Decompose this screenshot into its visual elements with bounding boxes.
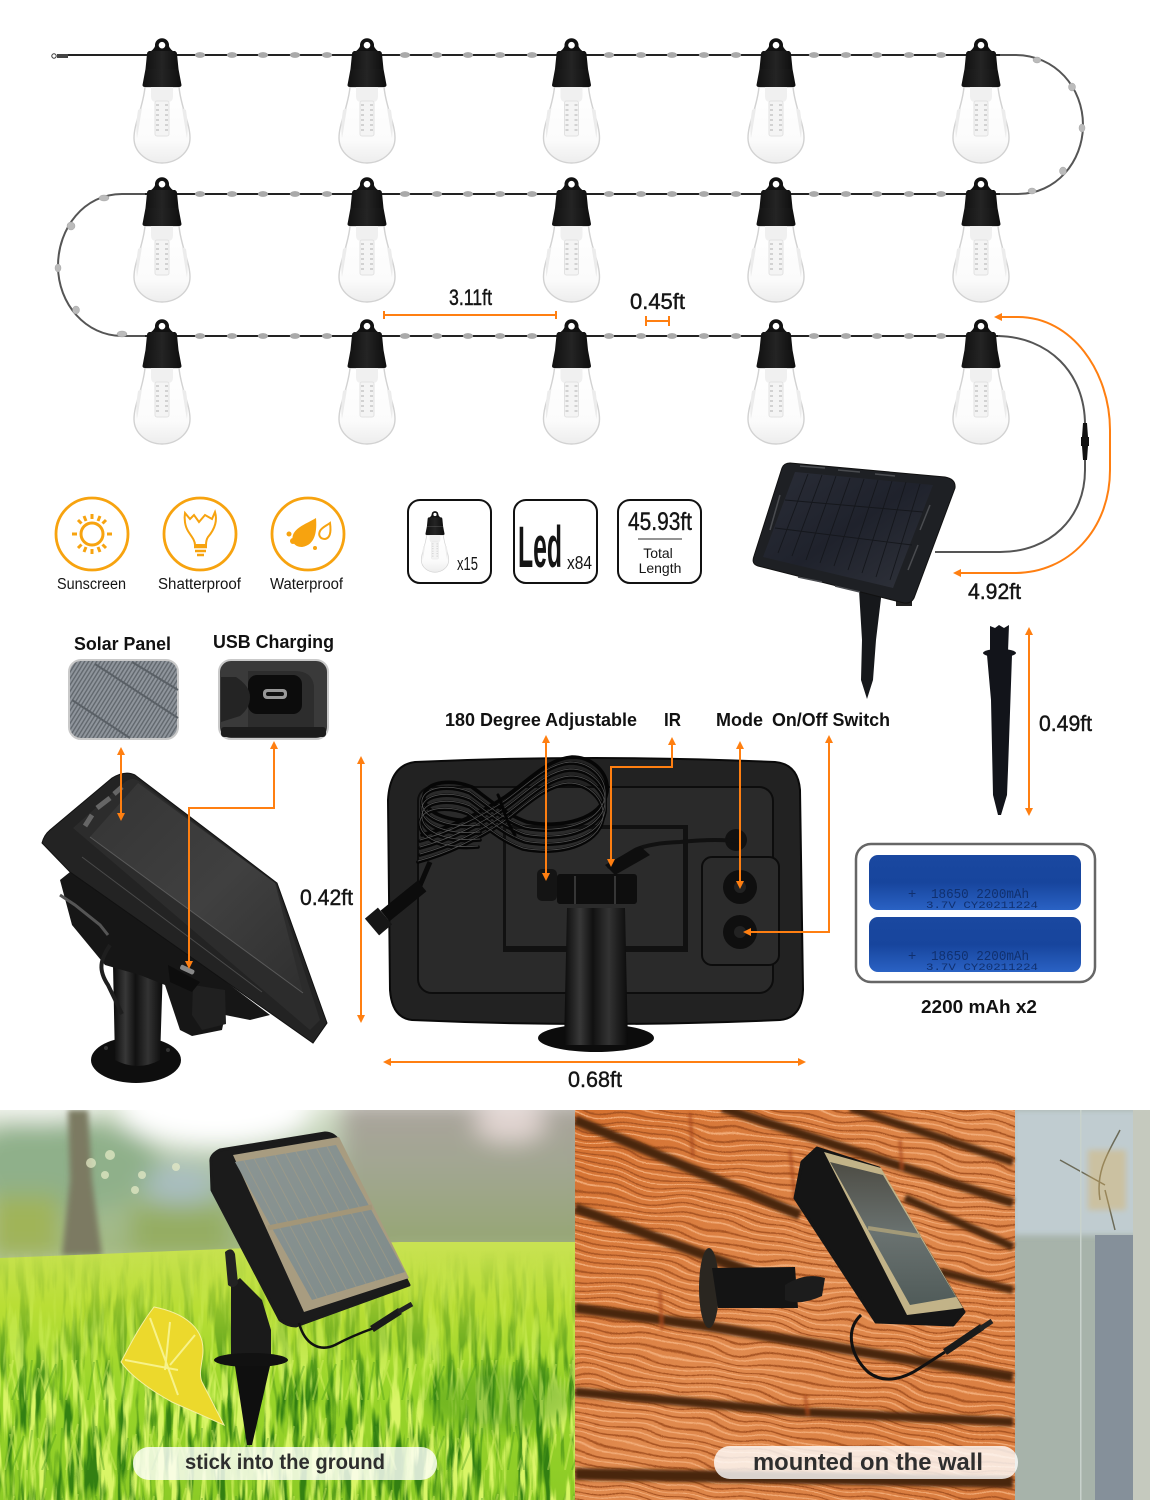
- cable: [851, 1315, 992, 1379]
- icon: shatterproof: [164, 498, 236, 570]
- panel: [211, 1133, 409, 1326]
- arrow: solar panel: [117, 747, 125, 821]
- dimension: 3.11ft: 3.11ft: [449, 285, 493, 310]
- beads row 1: [195, 52, 946, 58]
- dimension: 0.49ft: 0.49ft: [1039, 711, 1093, 736]
- bulbs row 1: [134, 38, 1009, 163]
- bulbs row 2: [134, 177, 1009, 302]
- wall mount: [699, 1248, 825, 1328]
- right background: [1013, 1110, 1150, 1500]
- rear bracket: [60, 868, 270, 1036]
- pill: ground caption: stick into the ground: [185, 1451, 385, 1474]
- arrow: switch: [743, 735, 833, 936]
- panel body: [42, 773, 327, 1043]
- dimension: 0.45ft: 0.45ft: [630, 289, 686, 314]
- blurred background: [0, 1110, 575, 1258]
- battery top: 18650 2200mAh: [931, 887, 1029, 903]
- dimension: 0.68ft: [383, 1058, 806, 1092]
- control box: [702, 857, 779, 965]
- label: battery: 2200 mAh x2: [921, 997, 1037, 1017]
- center device: back view: [372, 757, 803, 1052]
- pill: ground caption: [133, 1447, 437, 1480]
- coiled cable: [418, 757, 607, 862]
- dimension: 0.49ft: [1025, 627, 1093, 816]
- battery bottom: [869, 917, 1081, 974]
- pill: wall caption: [714, 1446, 1018, 1479]
- photo: ground: [0, 1110, 575, 1500]
- icon: waterproof: [272, 498, 344, 570]
- arrow: 180 degree: [542, 735, 550, 881]
- battery top: [869, 855, 1081, 912]
- dimension: 4.92ft cable arrow: 4.92ft: [968, 579, 1022, 604]
- wires: [58, 55, 1085, 552]
- thumbnail: solar panel: [69, 660, 178, 739]
- heading: USB Charging: USB Charging: [213, 632, 334, 652]
- spec box: LED x84: [514, 500, 597, 583]
- photo: wall: [560, 1095, 1150, 1500]
- label: Waterproof: Waterproof: [270, 576, 344, 593]
- battery top: 3.7V CY20211224: [926, 900, 1038, 912]
- spec box: bulbs x15: x15: [457, 554, 478, 574]
- right cable: [607, 840, 740, 867]
- spec box: LED x84: Led: [518, 515, 562, 580]
- spec box: total length: [618, 500, 701, 583]
- dimension: 4.92ft cable arrow: [953, 313, 1110, 604]
- stake: [214, 1249, 288, 1445]
- battery bottom: 3.7V CY20211224: [926, 962, 1038, 974]
- lawn: [0, 1240, 575, 1500]
- brick wall: [560, 1095, 1030, 1500]
- bulbs row 3: [134, 319, 1009, 444]
- icon: sunscreen: [56, 498, 128, 570]
- connector: [372, 862, 430, 927]
- callout arrows: [117, 627, 1093, 1092]
- label: IR: IR: [664, 710, 681, 730]
- label: On/Off Switch: On/Off Switch: [772, 710, 890, 730]
- feature icons: [56, 498, 344, 593]
- spec box: total length: 45.93ft: [628, 508, 692, 536]
- pill: wall caption: mounted on the wall: [753, 1449, 983, 1476]
- spec box: total length: Length: [639, 560, 681, 576]
- label: Sunscreen: Sunscreen: [57, 576, 126, 593]
- heading: Solar Panel: Solar Panel: [74, 634, 171, 654]
- dimension: 0.42ft: [300, 756, 365, 1023]
- beads row 3: [195, 333, 946, 339]
- thumbnail: USB port: [219, 660, 328, 739]
- cable: [299, 1304, 412, 1348]
- arrow: USB: [185, 741, 278, 969]
- dimension: 0.68ft: 0.68ft: [568, 1067, 623, 1092]
- label: 180 degree: 180 Degree Adjustable: [445, 710, 637, 730]
- battery bottom: 18650 2200mAh: [931, 949, 1029, 965]
- curve beads: [55, 57, 1085, 337]
- ground stake: [983, 625, 1016, 815]
- foot and column: [538, 1024, 654, 1052]
- spec box: total length: Total: [643, 545, 673, 561]
- dimension: 3.11ft: [384, 285, 556, 319]
- knob and hinge: [537, 869, 637, 904]
- leaf: [121, 1307, 224, 1425]
- battery bottom: +: [908, 947, 916, 963]
- panel side view: [795, 1148, 964, 1325]
- label: Shatterproof: Shatterproof: [158, 576, 242, 593]
- arrow: Mode: [736, 741, 744, 889]
- dimension: 0.42ft: 0.42ft: [300, 885, 354, 910]
- battery top: +: [908, 885, 916, 901]
- string lights: [52, 38, 1089, 552]
- callout labels: [445, 710, 890, 730]
- batteries: [856, 844, 1095, 982]
- label: Mode: Mode: [716, 710, 763, 730]
- column: [113, 965, 163, 1066]
- spec box: LED x84: x84: [567, 553, 592, 573]
- stand foot: [91, 1037, 181, 1083]
- spec box: bulbs x15: [408, 500, 491, 583]
- left device: solar panel on bracket: [42, 773, 327, 1083]
- wire connector: [1081, 423, 1089, 460]
- dimension: 0.45ft: [630, 289, 686, 326]
- beads row 2: [195, 191, 946, 197]
- solar panel with stake: [753, 463, 955, 699]
- arrow: IR: [607, 737, 676, 867]
- USB plug and cap: [168, 964, 226, 1030]
- end hook: [52, 54, 68, 58]
